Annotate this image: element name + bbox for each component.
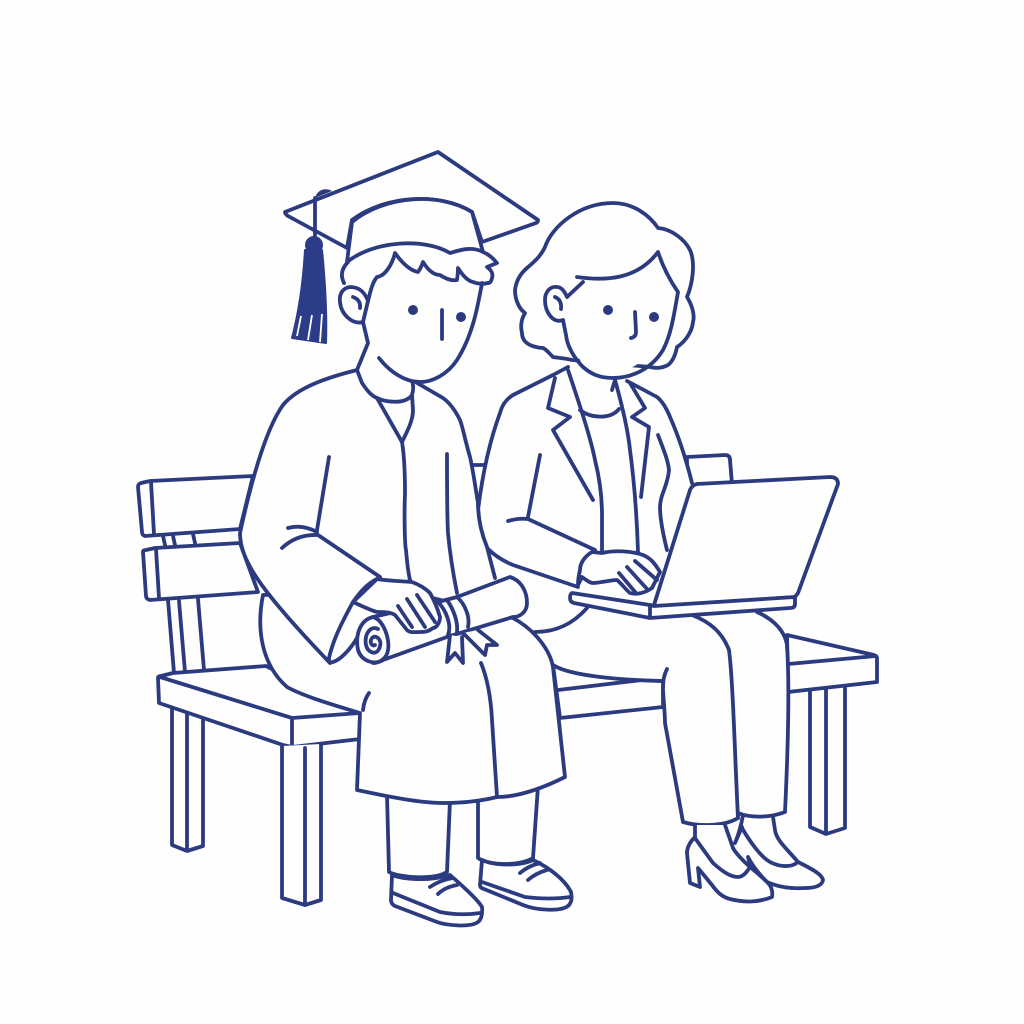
tassel <box>292 189 332 343</box>
woman: jacket <box>478 367 692 587</box>
man: left shoe <box>391 875 482 925</box>
woman: shoes <box>687 815 823 901</box>
woman <box>478 203 838 901</box>
man: legs <box>387 786 538 877</box>
man: hand <box>353 579 440 632</box>
man <box>240 152 572 925</box>
man: lower gown <box>260 590 565 803</box>
laptop screen <box>654 477 838 607</box>
woman: face <box>545 252 678 378</box>
man: diploma scroll <box>357 577 527 663</box>
woman: hair <box>515 203 694 368</box>
woman: hand <box>578 551 660 594</box>
man: hair <box>342 252 497 301</box>
man: upper gown <box>240 370 495 663</box>
man: diploma ribbon <box>447 630 497 663</box>
laptop base <box>570 593 795 618</box>
woman: trousers <box>500 575 788 825</box>
bench <box>138 455 877 905</box>
man: head <box>340 252 492 382</box>
man: right shoe <box>480 860 572 910</box>
mortarboard cap <box>285 152 538 262</box>
man: sleeve opening <box>329 579 377 662</box>
